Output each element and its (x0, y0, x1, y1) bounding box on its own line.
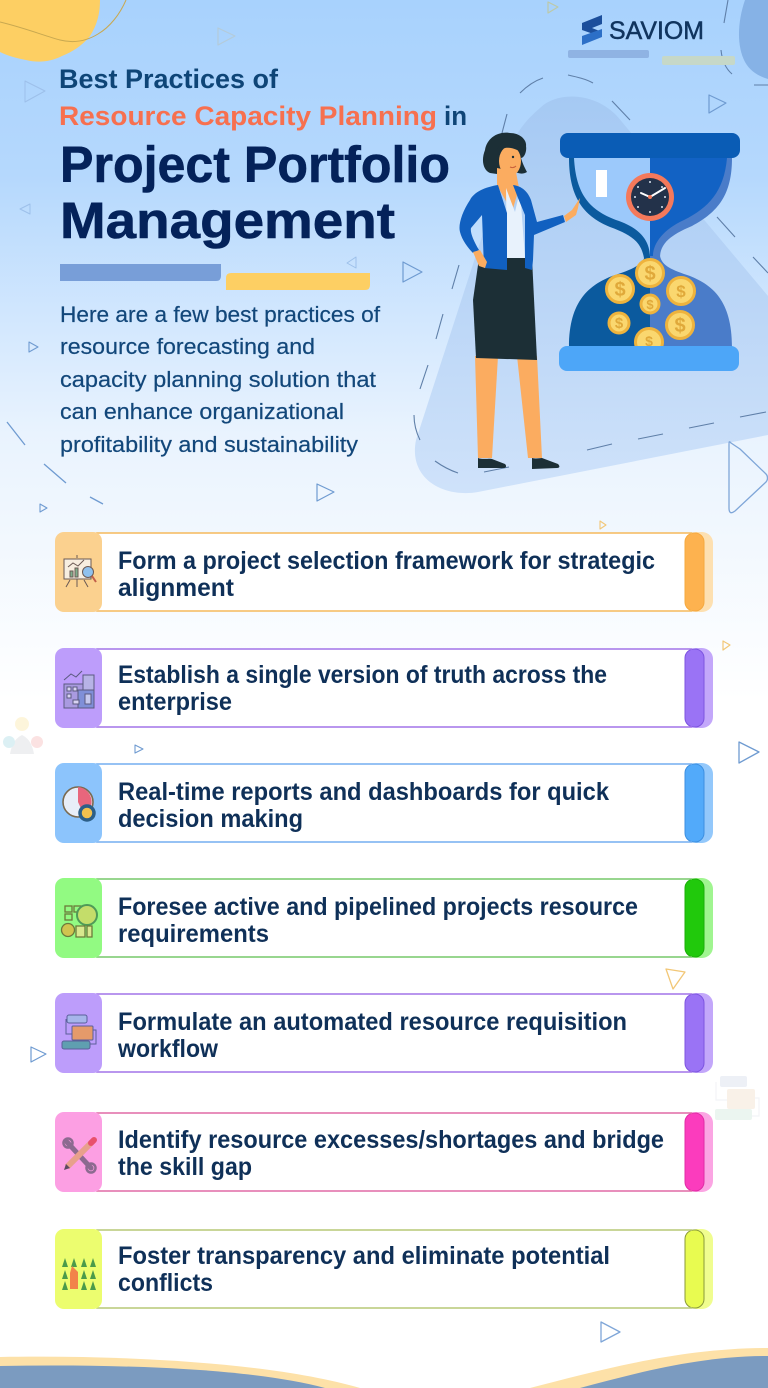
icon: coins: $ (646, 297, 654, 312)
card text: enterprise (118, 688, 232, 716)
card text (118, 893, 638, 948)
yellow corner blob (0, 0, 126, 62)
card text: alignment (118, 574, 235, 602)
faint decoration: chat icon (715, 1076, 759, 1120)
card text: Foresee active and pipelined projects resource (118, 893, 638, 921)
card text: Establish a single version of truth across the (118, 661, 607, 689)
heading: line 2: Resource Capacity Planning (59, 101, 437, 131)
intro text: can enhance organizational (60, 399, 344, 424)
card text: Real-time reports and dashboards for quick (118, 778, 609, 806)
blue corner blob (739, 0, 768, 79)
card text: Form a project selection framework for strategic (118, 547, 655, 575)
card 5 (55, 993, 713, 1073)
intro text (60, 302, 381, 457)
card tab (685, 648, 713, 728)
card 6 (55, 1112, 713, 1192)
icon: presentation chart (64, 555, 96, 587)
icon: logo mark (582, 15, 602, 45)
card text: requirements (118, 920, 269, 948)
card text (118, 778, 609, 833)
icon: resource search (62, 905, 97, 937)
icon: coins (606, 260, 694, 356)
icon: people group (62, 1258, 96, 1290)
card text: workflow (117, 1035, 219, 1063)
icon: coins: $ (615, 315, 624, 332)
icon: coins: $ (644, 263, 656, 285)
icon: wrench and pencil (64, 1138, 96, 1172)
card text (118, 547, 655, 602)
card tab (685, 532, 713, 612)
heading: line 2: in (444, 101, 467, 131)
icon: coins: $ (674, 315, 686, 337)
card text: Foster transparency and eliminate potential (118, 1242, 610, 1270)
backdrop triangle (415, 96, 768, 493)
intro text: resource forecasting and (60, 334, 315, 359)
card tab (685, 763, 713, 843)
title (59, 64, 467, 249)
card 2 (55, 648, 713, 728)
card text (117, 1008, 627, 1063)
card text: Formulate an automated resource requisition (118, 1008, 627, 1036)
card 3 (55, 763, 713, 843)
heading: line 1: Best Practices of (59, 64, 279, 94)
bottom wave right (530, 1348, 768, 1388)
icon: coins: $ (676, 282, 686, 301)
intro text: capacity planning solution that (60, 367, 376, 392)
card text (118, 1242, 610, 1297)
faint decoration: person icon (3, 717, 43, 754)
intro text: Here are a few best practices of (60, 302, 381, 327)
title underline bars (60, 264, 370, 290)
card 1 (55, 532, 713, 612)
bottom wave left (0, 1357, 360, 1388)
card tab (685, 878, 713, 958)
icon: clock (626, 173, 674, 221)
card 4 (55, 878, 713, 958)
illustration: woman (459, 133, 580, 469)
background (0, 0, 768, 700)
icon: workflow cards (62, 1015, 96, 1049)
logo (568, 15, 735, 65)
icon: coins: $ (614, 279, 626, 301)
dashed triangle outline (414, 0, 768, 473)
heading: line 3: Project Portfolio (60, 136, 450, 193)
card tab (685, 993, 713, 1073)
icon: pie clock and gear (63, 787, 94, 820)
card text: Identify resource excesses/shortages and bridge (118, 1126, 664, 1154)
logo wordmark: SAVIOM (609, 17, 704, 45)
card text: the skill gap (118, 1153, 252, 1181)
card tab (685, 1229, 713, 1309)
icon: city buildings (64, 671, 94, 708)
card text (118, 661, 607, 716)
card 7 (55, 1229, 713, 1309)
intro text: profitability and sustainability (60, 432, 358, 457)
card text (118, 1126, 664, 1181)
heading: line 4: Management (60, 192, 395, 249)
icon: coins: $ (645, 333, 653, 349)
illustration: hourglass (559, 133, 740, 371)
card text: decision making (118, 805, 303, 833)
card text: conflicts (118, 1269, 213, 1297)
card tab (685, 1112, 713, 1192)
